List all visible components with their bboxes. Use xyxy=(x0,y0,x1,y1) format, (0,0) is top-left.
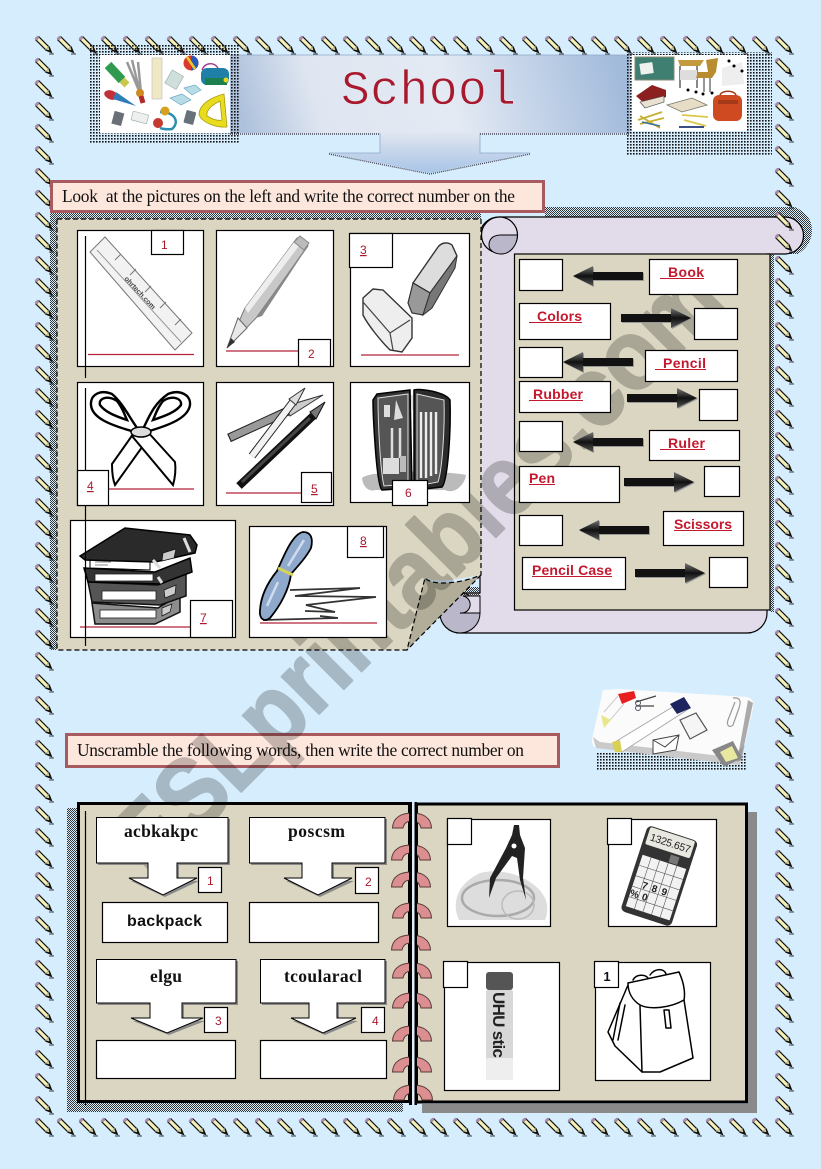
panel: notebook right page xyxy=(416,804,746,1102)
panel: parchment scroll xyxy=(440,217,804,633)
picture: compass xyxy=(448,818,550,926)
picture: calculator: 789 xyxy=(640,880,669,899)
picture: calculator: 1325.657 xyxy=(648,832,692,856)
number box 6: 6 xyxy=(405,486,412,500)
panel: notebook left page xyxy=(78,804,410,1102)
scramble callout: tcoularacl xyxy=(260,960,387,1035)
matching exercise xyxy=(520,260,748,590)
answer box: backpack: backpack xyxy=(127,913,202,930)
image: stationery pad xyxy=(592,689,753,770)
row: book xyxy=(520,260,738,294)
instruction box: look at the pictures: Look at the pictures on the left and write the correct number on the xyxy=(62,186,515,206)
instruction box: look at the pictures xyxy=(52,182,544,212)
row: book: Book xyxy=(668,264,704,280)
picture: glue stick: UHU stic xyxy=(489,992,508,1058)
number box 7 xyxy=(190,600,232,638)
row: pencil case xyxy=(522,558,748,590)
notebook spine xyxy=(409,802,417,1105)
check box xyxy=(608,818,632,844)
answer box: backpack xyxy=(102,902,228,942)
row: pencil case: Pencil Case xyxy=(532,562,612,578)
spiral binding rings xyxy=(392,813,432,1100)
row: rubber: Rubber xyxy=(533,386,584,402)
watermark: ESLprintables.com xyxy=(89,241,744,897)
title: School xyxy=(341,65,516,119)
row: colors: Colors xyxy=(537,308,582,324)
image: classroom clipart xyxy=(626,52,772,155)
picture 4: scissors xyxy=(78,382,204,506)
picture: calculator xyxy=(608,818,716,927)
panel: scroll shadow xyxy=(545,207,812,612)
number box: 1 xyxy=(207,874,214,888)
check box xyxy=(444,962,468,988)
banner arrow xyxy=(230,55,630,174)
scramble callout: elgu xyxy=(96,960,238,1035)
scramble callout: acbkakpc xyxy=(96,818,230,897)
row: ruler xyxy=(520,422,740,460)
number box 3: 3 xyxy=(360,243,367,257)
scramble callout: elgu: elgu xyxy=(150,966,182,986)
number box xyxy=(204,1008,228,1032)
number box xyxy=(198,868,222,892)
answer box xyxy=(260,1040,386,1078)
picture 7: books xyxy=(70,520,236,638)
row: pencil: Pencil xyxy=(663,355,706,371)
row: rubber xyxy=(520,382,738,420)
scramble callout: poscsm: poscsm xyxy=(288,821,345,841)
panel: left picture panel shadow xyxy=(50,213,481,650)
row: scissors: Scissors xyxy=(674,516,732,532)
number box: 2 xyxy=(365,875,372,889)
check box xyxy=(448,818,472,844)
notebook shadows xyxy=(67,808,757,1113)
panel: word list background xyxy=(514,254,770,610)
panel: left picture panel xyxy=(57,219,481,650)
number box 5: 5 xyxy=(311,482,318,496)
picture 5: pencils xyxy=(216,382,334,506)
scroll top curl xyxy=(482,217,518,254)
answer box xyxy=(96,1040,236,1078)
instruction box: unscramble: Unscramble the following words, then write the correct number on xyxy=(77,740,524,760)
number box 8: 8 xyxy=(360,534,367,548)
row: ruler: Ruler xyxy=(668,435,706,451)
scramble callout: poscsm xyxy=(250,818,387,897)
picture 8: pen xyxy=(250,526,386,638)
scroll bottom curl xyxy=(440,587,480,633)
scramble callout: acbkakpc: acbkakpc xyxy=(124,821,198,841)
picture 1: ruler xyxy=(78,230,204,366)
row: pen: Pen xyxy=(529,470,555,486)
check box: 1 xyxy=(603,969,611,984)
number box 1: 1 xyxy=(161,238,168,252)
vertical margin line xyxy=(84,236,86,646)
row: pen xyxy=(520,466,740,502)
number box: 4 xyxy=(372,1014,379,1028)
picture: calculator: %0 xyxy=(628,888,649,904)
picture 6: pencil case xyxy=(350,382,470,506)
scramble callout: tcoularacl: tcoularacl xyxy=(284,966,362,986)
number box xyxy=(362,1008,384,1032)
picture 3: rubbers xyxy=(350,234,470,366)
row: scissors xyxy=(520,512,744,546)
image: school supplies clipart xyxy=(89,45,239,143)
number box 4: 4 xyxy=(87,479,94,493)
number box 7: 7 xyxy=(200,611,207,625)
picture: backpack xyxy=(594,962,710,1080)
row: pencil xyxy=(520,348,738,382)
number box: 3 xyxy=(215,1014,222,1028)
picture: glue stick xyxy=(444,962,560,1090)
number box xyxy=(356,868,378,894)
number box 2: 2 xyxy=(308,347,315,361)
answer box xyxy=(250,902,378,942)
instruction box: unscramble xyxy=(66,734,558,766)
row: colors xyxy=(520,304,738,340)
picture 2: pencil xyxy=(216,230,334,366)
picture 1: ruler: ohrtech.com xyxy=(123,276,156,311)
notebook margin line xyxy=(84,811,86,1105)
